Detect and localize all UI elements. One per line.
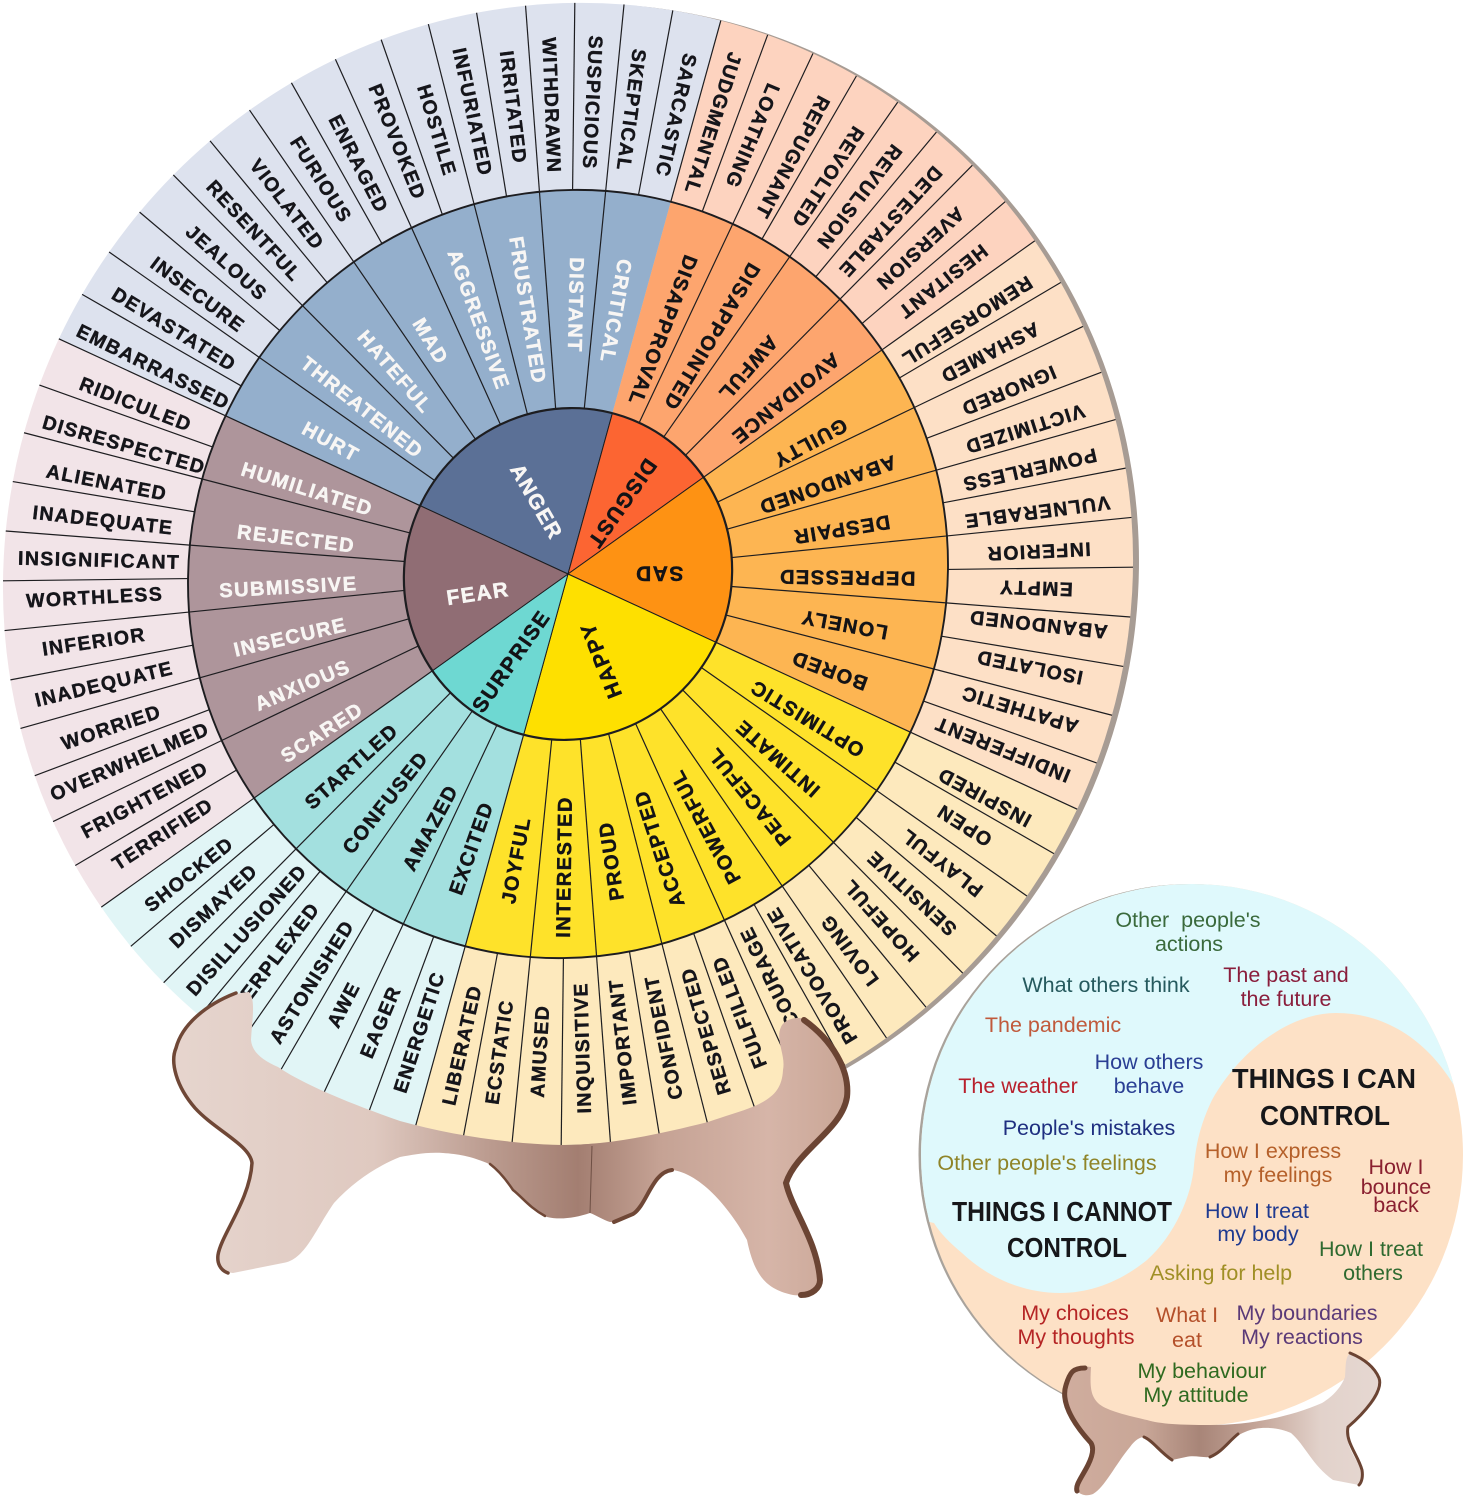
middle labels: disgust, sad, happy, surprise: OPTIMISTIC [746,675,868,761]
outer labels: happy: AMUSED [527,1004,554,1098]
middle labels: fear: HUMILIATED [238,459,375,521]
outer labels: anger: INFURIATED [448,46,496,178]
outer labels: sad [897,271,1111,786]
middle labels: disgust, sad, happy, surprise: AMAZED [399,781,463,875]
items within my control: What I [1156,1303,1218,1327]
heading: things I can control: THINGS I CAN [1232,1063,1416,1094]
outer labels: happy: LIBERATED [438,983,487,1107]
outer labels: surprise: SHOCKED [141,833,238,917]
items within my control: How I treat [1319,1237,1423,1261]
outer ring sectors [0,0,1140,1152]
outer labels: fear: INADEQUATE [33,657,176,712]
feelings wheel [0,0,1146,1153]
outer labels: disgust: HESITANT [893,239,992,323]
heading: things I cannot control: CONTROL [1007,1232,1127,1263]
items within my control: my feelings [1224,1163,1332,1187]
inner ring sectors [402,406,734,742]
items outside my control: The past and [1223,963,1349,987]
middle labels: disgust, sad, happy, surprise: DEPRESSED [778,565,916,589]
items within my control: My reactions [1241,1325,1363,1349]
items within my control: others [1343,1261,1403,1285]
outer labels: anger: FURIOUS [285,133,356,227]
outer labels: happy: RESPECTED [677,965,736,1097]
outer labels: sad: VICTIMIZED [962,399,1087,458]
items within my control: my body [1217,1222,1299,1246]
labels: inner ring emotions [445,454,683,717]
outer labels: happy: LOVING [816,910,884,990]
items within my control: How I treat [1205,1199,1309,1223]
outer labels: disgust: REVULSION [812,140,906,253]
labels: inner ring emotions: DISGUST [582,454,661,552]
outer labels: surprise: DISILLUSIONED [183,860,312,1001]
labels: outer ring [18,35,1111,1114]
outer labels: disgust: AVERSION [871,202,968,294]
middle labels: disgust, sad, happy, surprise: AWFUL [713,331,782,405]
middle labels: fear: ANXIOUS [252,656,354,716]
outer labels: fear: INSIGNIFICANT [18,548,181,574]
outer labels: anger: VIOLATED [245,155,328,255]
middle labels: anger: CRITICAL [595,257,635,365]
middle labels: disgust, sad, happy, surprise: BORED [788,646,871,694]
middle labels: disgust, sad, happy, surprise: AVOIDANCE [727,348,843,448]
heading: things I cannot control [952,1196,1172,1263]
middle labels: disgust, sad, happy, surprise [301,252,916,938]
items outside my control: What others think [1022,973,1190,997]
outer labels: anger: HOSTILE [412,82,460,179]
wooden stand: large [174,992,847,1295]
outer labels: sad: EMPTY [998,576,1073,600]
middle labels: disgust, sad, happy, surprise: PEACEFUL [703,743,796,850]
middle ring sectors [183,185,953,963]
outer labels: surprise: EAGER [356,983,406,1062]
outer labels: surprise: AWE [323,978,365,1032]
outer labels: happy: INQUISITIVE [570,982,596,1114]
outer labels: happy: CONFIDENT [641,973,688,1101]
outer labels: happy: PLAYFUL [897,824,987,901]
outer labels: anger: DEVASTATED [108,283,240,376]
outer labels: disgust: DETESTABLE [834,161,946,282]
outer labels: sad: REMORSEFUL [897,271,1036,370]
items outside my control: How others [1095,1050,1203,1074]
middle labels: disgust, sad, happy, surprise: STARTLED [301,720,403,814]
middle labels: anger: FRUSTRATED [504,235,550,386]
heading: things I can control [1232,1063,1416,1131]
outer labels: sad: IGNORED [958,361,1059,420]
items within my control: eat [1172,1328,1202,1352]
labels: inner ring emotions: FEAR [445,578,511,610]
outer labels: sad: VULNERABLE [963,491,1111,532]
items outside my control: The pandemic [985,1013,1121,1037]
middle labels: disgust, sad, happy, surprise: EXCITED [445,799,499,898]
outer labels: fear: TERRIFIED [108,794,218,875]
outer labels: surprise: PERPLEXED [228,899,325,1016]
heading: things I can control: CONTROL [1260,1100,1390,1131]
heading: things I cannot control: THINGS I CANNOT [952,1196,1172,1227]
stand body [174,992,845,1295]
items within my control: My behaviour [1137,1359,1267,1383]
outer labels: happy: INSPIRED [934,763,1035,831]
middle labels: disgust, sad, happy, surprise: JOYFUL [498,815,535,906]
outer labels: anger: SUSPICIOUS [578,35,606,170]
middle labels: anger: MAD [408,314,452,369]
outer labels: anger: RESENTFUL [202,176,306,286]
outer labels: disgust: JUDGMENTAL [680,50,745,197]
outer labels: sad: INDIFFERENT [932,712,1074,786]
middle labels: disgust, sad, happy, surprise: DESPAIR [791,510,892,548]
outer labels: fear: WORRIED [59,701,164,755]
items within my control: bounce [1361,1175,1431,1199]
items outside my control: actions [1155,932,1223,956]
wooden stand: small [1065,1353,1380,1495]
outer labels: happy: SENSITIVE [863,846,961,940]
middle labels: anger: HURT [298,418,363,467]
outer labels: fear: RIDICULED [76,373,195,437]
labels: inner ring emotions: HAPPY [576,619,627,701]
middle labels: fear: SCARED [277,698,368,768]
labels: inner ring emotions: SAD [635,562,683,584]
outer labels: happy: ECSTATIC [482,998,518,1106]
outer labels: fear: ALIENATED [44,461,169,506]
stand cut edges [174,993,847,1295]
middle labels: disgust, sad, happy, surprise: PROUD [595,820,629,902]
outer labels: fear: WORTHLESS [26,583,164,612]
items within my control: back [1373,1193,1419,1217]
outer labels: happy: FULFILLED [708,953,772,1071]
outer labels: anger: WITHDRAWN [537,37,565,174]
small stand body [1067,1353,1380,1495]
items outside my control: behave [1114,1074,1184,1098]
outer labels: sad: INFERIOR [986,537,1091,564]
labels: inner ring emotions: ANGER [505,460,567,544]
outer labels: anger: IRRITATED [495,50,530,165]
outer labels: anger: SARCASTIC [650,51,701,179]
outer labels: happy: COURAGE [736,923,805,1031]
middle labels: fear: REJECTED [236,521,356,558]
items within my control: My attitude [1143,1383,1249,1407]
items outside my control: People's mistakes [1003,1116,1175,1140]
outer labels: surprise: ASTONISHED [265,916,359,1048]
wheel wedges and spokes [0,0,1146,1153]
stand centre seam [590,1146,592,1213]
items outside my control: the future [1241,987,1331,1011]
outer labels: surprise: DISMAYED [166,860,262,953]
items outside my control: Other people's [1115,908,1261,932]
middle labels: disgust, sad, happy, surprise: INTERESTED [553,796,577,938]
middle labels: anger: AGGRESSIVE [443,247,513,393]
outer labels: disgust [680,50,992,323]
items within my control [1017,1139,1431,1407]
outer labels: anger: INSECURE [146,253,249,337]
outer labels: fear: OVERWHELMED [47,718,213,806]
board peach background [921,884,1463,1426]
middle labels: disgust, sad, happy, surprise: INTIMATE [731,715,825,801]
items within my control: My thoughts [1017,1325,1135,1349]
middle labels: anger: THREATENED [296,353,427,463]
middle labels: disgust, sad, happy, surprise: DISAPPOINTED [658,259,764,414]
middle labels: disgust, sad, happy, surprise: DISAPPROVAL [623,252,701,409]
outer labels: fear: INFERIOR [41,624,147,661]
outer labels: sad: APATHETIC [959,681,1081,737]
items outside my control [937,908,1349,1175]
control circle board [900,860,1465,1426]
outer labels: fear: INADEQUATE [31,502,174,540]
outer labels: sad: ASHAMED [936,317,1043,387]
middle labels: anger: DISTANT [563,257,587,353]
outer labels: sad: ISOLATED [974,645,1085,688]
middle labels: fear: SUBMISSIVE [219,573,358,602]
middle labels: anger [296,235,635,467]
middle labels: disgust, sad, happy, surprise: POWERFUL [666,765,746,887]
items within my control: Asking for help [1150,1261,1292,1285]
outer labels: anger: SKEPTICAL [612,48,650,173]
items outside my control: Other people's feelings [937,1151,1157,1175]
outer labels: anger [73,35,701,415]
middle labels: disgust, sad, happy, surprise: CONFUSED [339,748,433,859]
outer labels: happy [438,763,1035,1114]
outer labels: anger: PROVOKED [364,81,430,203]
outer labels: happy: PROVOCATIVE [763,903,862,1047]
items within my control: How I express [1205,1139,1341,1163]
outer labels: fear [18,373,218,875]
middle labels: anger: HATEFUL [353,326,436,418]
outer labels: sad: ABANDONED [968,606,1109,642]
middle labels: disgust, sad, happy, surprise: GUILTY [769,413,851,471]
labels: middle ring [219,235,916,938]
outer labels: fear: DISRESPECTED [40,412,208,479]
wheel rim [2,0,1146,1153]
outer labels: disgust: REVOLTED [786,122,868,231]
board rim [918,884,1460,1426]
board blue region [921,884,1454,1293]
middle labels: disgust, sad, happy, surprise: LONELY [799,605,890,643]
items within my control: My boundaries [1236,1301,1378,1325]
middle labels: disgust, sad, happy, surprise: ABANDONED [756,450,899,518]
outer labels: anger: EMBARRASSED [73,320,233,415]
middle labels: fear: INSECURE [232,614,349,662]
small stand cut edges [1065,1353,1380,1491]
labels: inner ring emotions: SURPRISE [468,606,555,717]
items within my control: How I [1369,1155,1423,1179]
outer labels: disgust: LOATHING [720,80,784,191]
items outside my control: The weather [958,1074,1078,1098]
middle labels: disgust, sad, happy, surprise: ACCEPTED [630,787,690,910]
outer labels: happy: HOPEFUL [839,874,924,966]
outer labels: anger: ENRAGED [324,112,392,217]
outer labels: surprise [141,833,450,1096]
outer labels: happy: IMPORTANT [605,977,641,1106]
outer labels: disgust: REPUGNANT [750,92,834,222]
items within my control: My choices [1021,1301,1129,1325]
outer labels: happy: OPEN [933,799,996,851]
outer labels: surprise: ENERGETIC [390,969,450,1096]
outer labels: anger: JEALOUS [181,221,271,306]
outer labels: sad: POWERLESS [960,443,1099,495]
outer labels: fear: FRIGHTENED [78,757,212,843]
middle labels: fear [219,459,375,768]
